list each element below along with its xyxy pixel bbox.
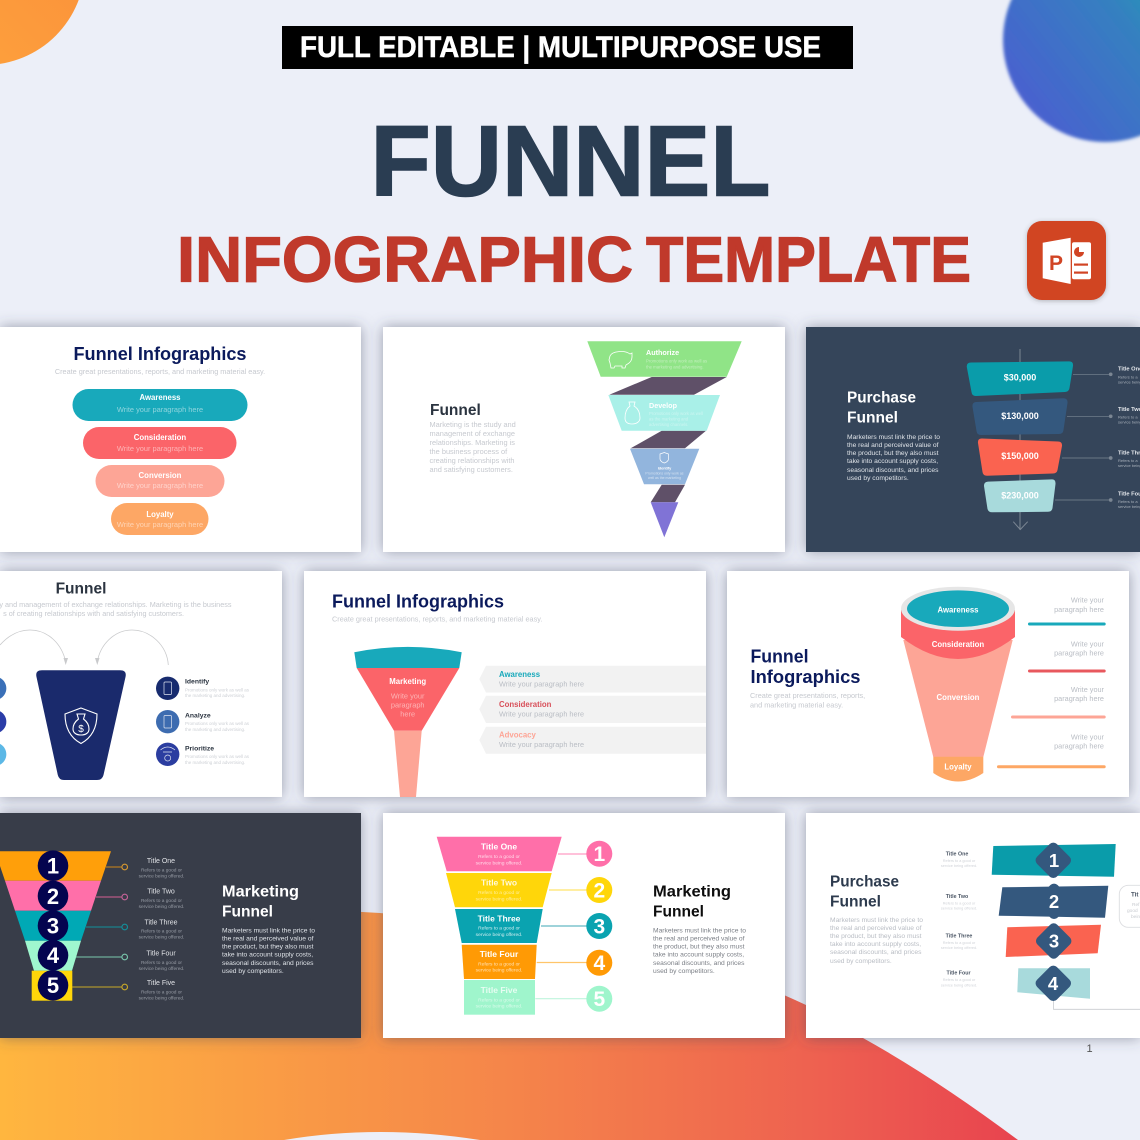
description xyxy=(830,917,923,965)
description: seasonal discounts, and prices xyxy=(830,949,922,956)
label details: Refers to a xyxy=(1118,499,1138,504)
numbered diamonds: 3 xyxy=(1049,931,1059,952)
numbered circles: 5 xyxy=(593,988,605,1011)
icon dot: analyze xyxy=(156,710,179,733)
chevron: awareness: Awareness xyxy=(499,670,541,679)
pill: awareness: Awareness xyxy=(139,393,181,402)
labels: Title Four xyxy=(946,970,971,976)
panel: single funnel with chevrons xyxy=(304,571,706,797)
label details: Refers to a good or xyxy=(943,941,976,945)
chevron: advocacy xyxy=(479,727,706,754)
chevron: consideration: Consideration xyxy=(499,700,552,709)
right notes xyxy=(1054,596,1105,750)
labels: Title Four xyxy=(146,950,176,957)
pill: conversion: Conversion xyxy=(139,471,182,480)
pill: conversion xyxy=(96,465,224,497)
page number: 1 xyxy=(1086,1043,1093,1055)
label details: service being offered. xyxy=(941,983,977,987)
funnel: Conversion xyxy=(937,693,980,702)
label details: Refers to a xyxy=(1118,375,1138,380)
numbered circles: 2 xyxy=(593,880,605,902)
heading xyxy=(750,647,860,687)
description: Marketers must link the price to xyxy=(653,928,746,935)
panel: purchase funnel dark xyxy=(806,327,1140,552)
numbered badges: 3 xyxy=(47,914,59,938)
title: FUNNEL xyxy=(370,106,770,218)
chevron: advocacy: Write your paragraph here xyxy=(499,740,584,749)
right notes: Write your xyxy=(1071,732,1105,741)
tier 2: Refers to a good or xyxy=(478,890,520,896)
right notes: paragraph here xyxy=(1054,741,1104,750)
panel: funnel with arcs xyxy=(0,571,282,797)
label details: Refers to a good or xyxy=(141,868,182,874)
label details: Refers to a good or xyxy=(141,929,182,935)
icon: shield with money bag xyxy=(65,708,97,744)
tier 4: Refers to a good or xyxy=(478,961,520,967)
background gradient wave xyxy=(0,910,1018,1140)
subtitle: INFOGRAPHIC xyxy=(177,224,633,296)
icon dot: identify xyxy=(156,677,179,700)
chevron: consideration: Write your paragraph here xyxy=(499,710,584,718)
description xyxy=(750,691,865,709)
description: seasonal discounts, and prices xyxy=(222,960,314,967)
tier 3: Title Three xyxy=(478,913,521,923)
funnel: Awareness xyxy=(937,606,979,615)
heading: Funnel xyxy=(430,402,481,419)
heading: Infographics xyxy=(750,667,860,687)
heading: Funnel xyxy=(830,893,881,910)
tier: develop xyxy=(608,395,720,431)
label details: service being offered. xyxy=(139,904,184,910)
heading: Marketing xyxy=(653,883,731,900)
label details: the marketing and advertising. xyxy=(185,760,245,765)
label details: service being offered. xyxy=(941,946,977,950)
tier 3: service being offered. xyxy=(476,932,522,938)
label details: Refers to a good or xyxy=(141,990,182,996)
connectors xyxy=(535,854,590,999)
description: seasonal discounts, and prices xyxy=(653,960,745,967)
tier: develop: Develop xyxy=(649,401,678,410)
description: the product, but they also must xyxy=(830,933,922,940)
funnel: Marketing xyxy=(389,677,426,686)
tier 4: Title Four xyxy=(480,949,519,959)
tier 1: Title One xyxy=(481,842,517,852)
funnel: here xyxy=(400,710,415,719)
label details xyxy=(139,868,184,1002)
tier: 230,000 xyxy=(984,479,1056,512)
tier: 150,000: $150,000 xyxy=(1001,451,1039,461)
numbered circles: 1 xyxy=(593,843,605,866)
tier: authorize: Authorize xyxy=(646,348,679,357)
label details: Refers to a xyxy=(1118,458,1138,463)
icon: powerpoint xyxy=(1027,221,1106,300)
label details: Refers to a xyxy=(1118,414,1138,420)
icon dot: prioritize xyxy=(156,743,179,766)
tier: 130,000: $130,000 xyxy=(1001,411,1039,421)
numbered badges: 4 xyxy=(47,943,60,968)
funnel: Consideration xyxy=(932,640,984,649)
pill: awareness xyxy=(72,389,248,421)
funnel xyxy=(901,587,1015,782)
labels: Title Two xyxy=(147,888,175,895)
decorative orange circle xyxy=(0,0,85,65)
pill: consideration: Consideration xyxy=(134,433,186,442)
label details: service being offered. xyxy=(941,864,977,868)
tier 4 xyxy=(462,945,537,979)
tier: 30,000: $30,000 xyxy=(1004,373,1036,383)
chevron: advocacy: Advocacy xyxy=(499,731,537,740)
description: Marketers must link the price to xyxy=(847,434,940,441)
label details: service being offered. xyxy=(139,996,184,1002)
right notes: paragraph here xyxy=(1054,605,1104,614)
heading: Funnel xyxy=(750,647,808,667)
icon: powerpoint: P xyxy=(1049,252,1063,275)
labels xyxy=(946,851,972,976)
side callout: good xyxy=(1127,908,1138,914)
tier 1: Refers to a good or xyxy=(478,854,520,860)
heading xyxy=(222,883,299,920)
description: and satisfying customers. xyxy=(430,465,513,474)
pill: loyalty: Write your paragraph here xyxy=(117,520,203,529)
description: Create great presentations, reports, xyxy=(750,691,865,700)
label details: service being offered. xyxy=(941,907,977,911)
tier: authorize xyxy=(587,341,742,377)
heading: Funnel xyxy=(847,410,898,427)
numbered circles xyxy=(586,841,612,1012)
description: the business process of xyxy=(430,447,508,456)
label details: Refers to a good or xyxy=(943,859,976,863)
panel: marketing funnel dark xyxy=(0,813,361,1038)
description: used by competitors. xyxy=(830,958,892,965)
note lines xyxy=(997,622,1106,768)
label details: Refers to a good or xyxy=(141,960,182,966)
description: take into account supply costs, xyxy=(222,952,313,959)
tier: 130,000 xyxy=(972,398,1068,435)
heading: Funnel xyxy=(653,903,704,920)
description: used by competitors. xyxy=(653,968,715,975)
description: the product, but they also must xyxy=(222,944,314,951)
panel: purchase funnel light xyxy=(806,813,1140,1038)
description: Create great presentations, reports, and marketing material easy. xyxy=(55,367,265,376)
right notes: Write your xyxy=(1071,596,1105,605)
heading: Purchase xyxy=(847,390,916,407)
labels xyxy=(144,858,178,987)
pill: consideration: Write your paragraph here xyxy=(117,444,203,453)
tier: identify: well as the marketing xyxy=(648,476,681,480)
pill: consideration xyxy=(83,427,236,459)
tier: identify: Identify xyxy=(658,466,672,470)
right notes: paragraph here xyxy=(1054,694,1104,703)
description: Marketing is the study and xyxy=(430,420,516,429)
bar 1 xyxy=(992,844,1116,877)
side callout: Tit xyxy=(1131,892,1138,899)
funnel xyxy=(354,647,462,797)
description: s of creating relationships with and satisfying customers. xyxy=(3,609,184,618)
right notes: paragraph here xyxy=(1054,649,1104,658)
labels: Analyze xyxy=(185,713,211,720)
description xyxy=(430,420,516,474)
arcs xyxy=(0,630,168,665)
tier 5: service being offered. xyxy=(476,1004,522,1010)
chevron: awareness: Write your paragraph here xyxy=(499,680,584,688)
tier 3 xyxy=(455,909,543,943)
funnel xyxy=(0,851,111,1001)
right notes: Write your xyxy=(1071,640,1105,649)
numbered circles: 3 xyxy=(593,916,605,938)
tier: develop: advertising channels. xyxy=(649,422,688,427)
numbered badges: 1 xyxy=(47,854,59,878)
tier: identify: Promotions only work as xyxy=(645,472,684,476)
description: take into account supply costs, xyxy=(830,941,921,948)
funnel axis xyxy=(1013,349,1028,530)
tier: 30,000 xyxy=(967,361,1073,396)
label details: Refers to a good or xyxy=(141,898,182,904)
tier: develop: as the marketing and xyxy=(649,416,689,422)
heading: Funnel xyxy=(56,580,106,598)
labels: Identify xyxy=(185,679,209,686)
description xyxy=(0,600,232,618)
description: Create great presentations, reports, and marketing material easy. xyxy=(332,615,542,624)
chevron: awareness xyxy=(479,666,706,692)
tier 5: Refers to a good or xyxy=(478,997,520,1003)
tier: tip xyxy=(651,502,678,537)
numbered diamonds: 2 xyxy=(1049,891,1059,912)
heading xyxy=(830,873,899,910)
label details: service being offered. xyxy=(139,966,184,972)
tier: develop: Promotions only work as well xyxy=(649,411,703,416)
label details: Promotions only work as well as xyxy=(185,687,250,692)
pill: awareness: Write your paragraph here xyxy=(117,405,203,414)
tier: authorize: Promotions only work as well as xyxy=(646,358,707,364)
tier: identify xyxy=(630,449,699,484)
description: the product, but they also must xyxy=(653,944,745,951)
banner: FULL EDITABLE | MULTIPURPOSE USE xyxy=(300,31,821,64)
tier: 150,000 xyxy=(978,438,1062,476)
label details xyxy=(1118,375,1140,509)
numbered diamonds: 1 xyxy=(1049,850,1059,871)
labels: Prioritize xyxy=(185,746,214,753)
side callout: Ref xyxy=(1132,902,1140,908)
panel: funnel with zigzag xyxy=(383,327,785,552)
label details xyxy=(941,859,977,987)
tier 5: Title Five xyxy=(481,985,518,995)
tier: 230,000: $230,000 xyxy=(1001,491,1039,501)
description: take into account supply costs, xyxy=(847,458,938,465)
label details: service being offered. xyxy=(139,935,184,941)
tier 2: Title Two xyxy=(481,878,517,888)
funnel: Write your xyxy=(391,692,425,701)
labels: Title Three xyxy=(144,919,178,926)
numbered badges xyxy=(38,850,68,1001)
numbered badges: 2 xyxy=(47,884,59,909)
description: take into account supply costs, xyxy=(653,952,744,959)
label details: the marketing and advertising. xyxy=(185,693,245,698)
zigzag funnel xyxy=(587,341,742,537)
description: the real and perceived value of xyxy=(653,936,745,943)
labels xyxy=(185,679,214,753)
description: the real and perceived value of xyxy=(847,442,939,449)
description: creating relationships with xyxy=(430,456,515,465)
label details: Promotions only work as well as xyxy=(185,754,250,759)
connector xyxy=(1054,1001,1140,1009)
icon dots left xyxy=(0,678,6,765)
bar 2 xyxy=(999,886,1108,918)
label details: Refers to a good or xyxy=(943,902,976,906)
labels: Title One xyxy=(147,858,175,865)
description: the product, but they also must xyxy=(847,450,939,457)
labels: Title Five xyxy=(147,980,175,987)
pill: loyalty: Loyalty xyxy=(146,510,174,519)
label details: the marketing and advertising. xyxy=(185,727,245,732)
connectors xyxy=(1055,373,1112,502)
connectors xyxy=(72,864,127,990)
label details: Refers to a good or xyxy=(943,978,976,982)
label details: Promotions only work as well as xyxy=(185,721,250,726)
description: Marketers must link the price to xyxy=(222,928,315,935)
heading: Funnel Infographics xyxy=(74,344,247,364)
heading: Purchase xyxy=(830,873,899,890)
description: management of exchange xyxy=(430,429,515,438)
description: and marketing material easy. xyxy=(750,700,843,709)
labels: Title Three xyxy=(946,934,972,940)
icon: shield with money bag: $ xyxy=(78,724,84,735)
pill: loyalty xyxy=(111,503,208,535)
pill: conversion: Write your paragraph here xyxy=(117,481,203,490)
tier 3: Refers to a good or xyxy=(478,926,520,932)
tier 4: service being offered. xyxy=(476,968,522,974)
labels: Title Two xyxy=(946,894,969,900)
funnel: paragraph xyxy=(391,701,425,710)
numbered circles: 4 xyxy=(593,952,605,975)
description xyxy=(847,434,940,482)
numbered badges: 5 xyxy=(47,973,59,998)
heading xyxy=(847,390,916,427)
labels xyxy=(1118,367,1140,498)
label details: service being offered. xyxy=(139,874,184,880)
labels: Title One xyxy=(946,851,968,857)
arrowheads xyxy=(64,658,100,665)
heading: Funnel xyxy=(222,903,273,920)
description: used by competitors. xyxy=(222,968,284,975)
bar 3 xyxy=(1006,925,1101,957)
decorative blue circle xyxy=(1003,0,1140,142)
tier 1 xyxy=(437,837,562,871)
central funnel xyxy=(36,670,126,780)
panel: marketing funnel light xyxy=(383,813,785,1038)
right notes: Write your xyxy=(1071,685,1105,694)
description: seasonal discounts, and prices xyxy=(847,467,939,474)
heading xyxy=(653,883,731,920)
bar 4 xyxy=(1017,968,1090,999)
description: the real and perceived value of xyxy=(830,925,922,932)
description: the real and perceived value of xyxy=(222,936,314,943)
description: used by competitors. xyxy=(847,475,909,482)
description: Marketers must link the price to xyxy=(830,917,923,924)
panel: funnel infographics pills xyxy=(0,327,361,552)
funnel: Loyalty xyxy=(944,762,972,771)
description xyxy=(222,928,315,975)
panel: 3d funnel xyxy=(727,571,1129,797)
label details xyxy=(185,687,250,765)
tier 5 xyxy=(464,980,535,1015)
chevron: consideration xyxy=(479,696,706,723)
tier 2: service being offered. xyxy=(476,896,522,902)
tier: authorize: the marketing and advertising. xyxy=(646,364,704,370)
tier 1: service being offered. xyxy=(476,860,522,866)
description xyxy=(653,928,746,975)
heading: Marketing xyxy=(222,883,299,900)
side callout: bein xyxy=(1131,914,1140,920)
subtitle xyxy=(177,224,971,296)
numbered diamonds: 4 xyxy=(1048,973,1059,994)
side callout xyxy=(1119,885,1140,927)
numbered diamonds xyxy=(1034,841,1074,1003)
description: relationships. Marketing is xyxy=(430,438,515,447)
heading: Funnel Infographics xyxy=(332,592,504,612)
tier 2 xyxy=(446,873,552,907)
subtitle: TEMPLATE xyxy=(646,224,971,296)
description: y and management of exchange relationships. Marketing is the business xyxy=(0,600,232,609)
